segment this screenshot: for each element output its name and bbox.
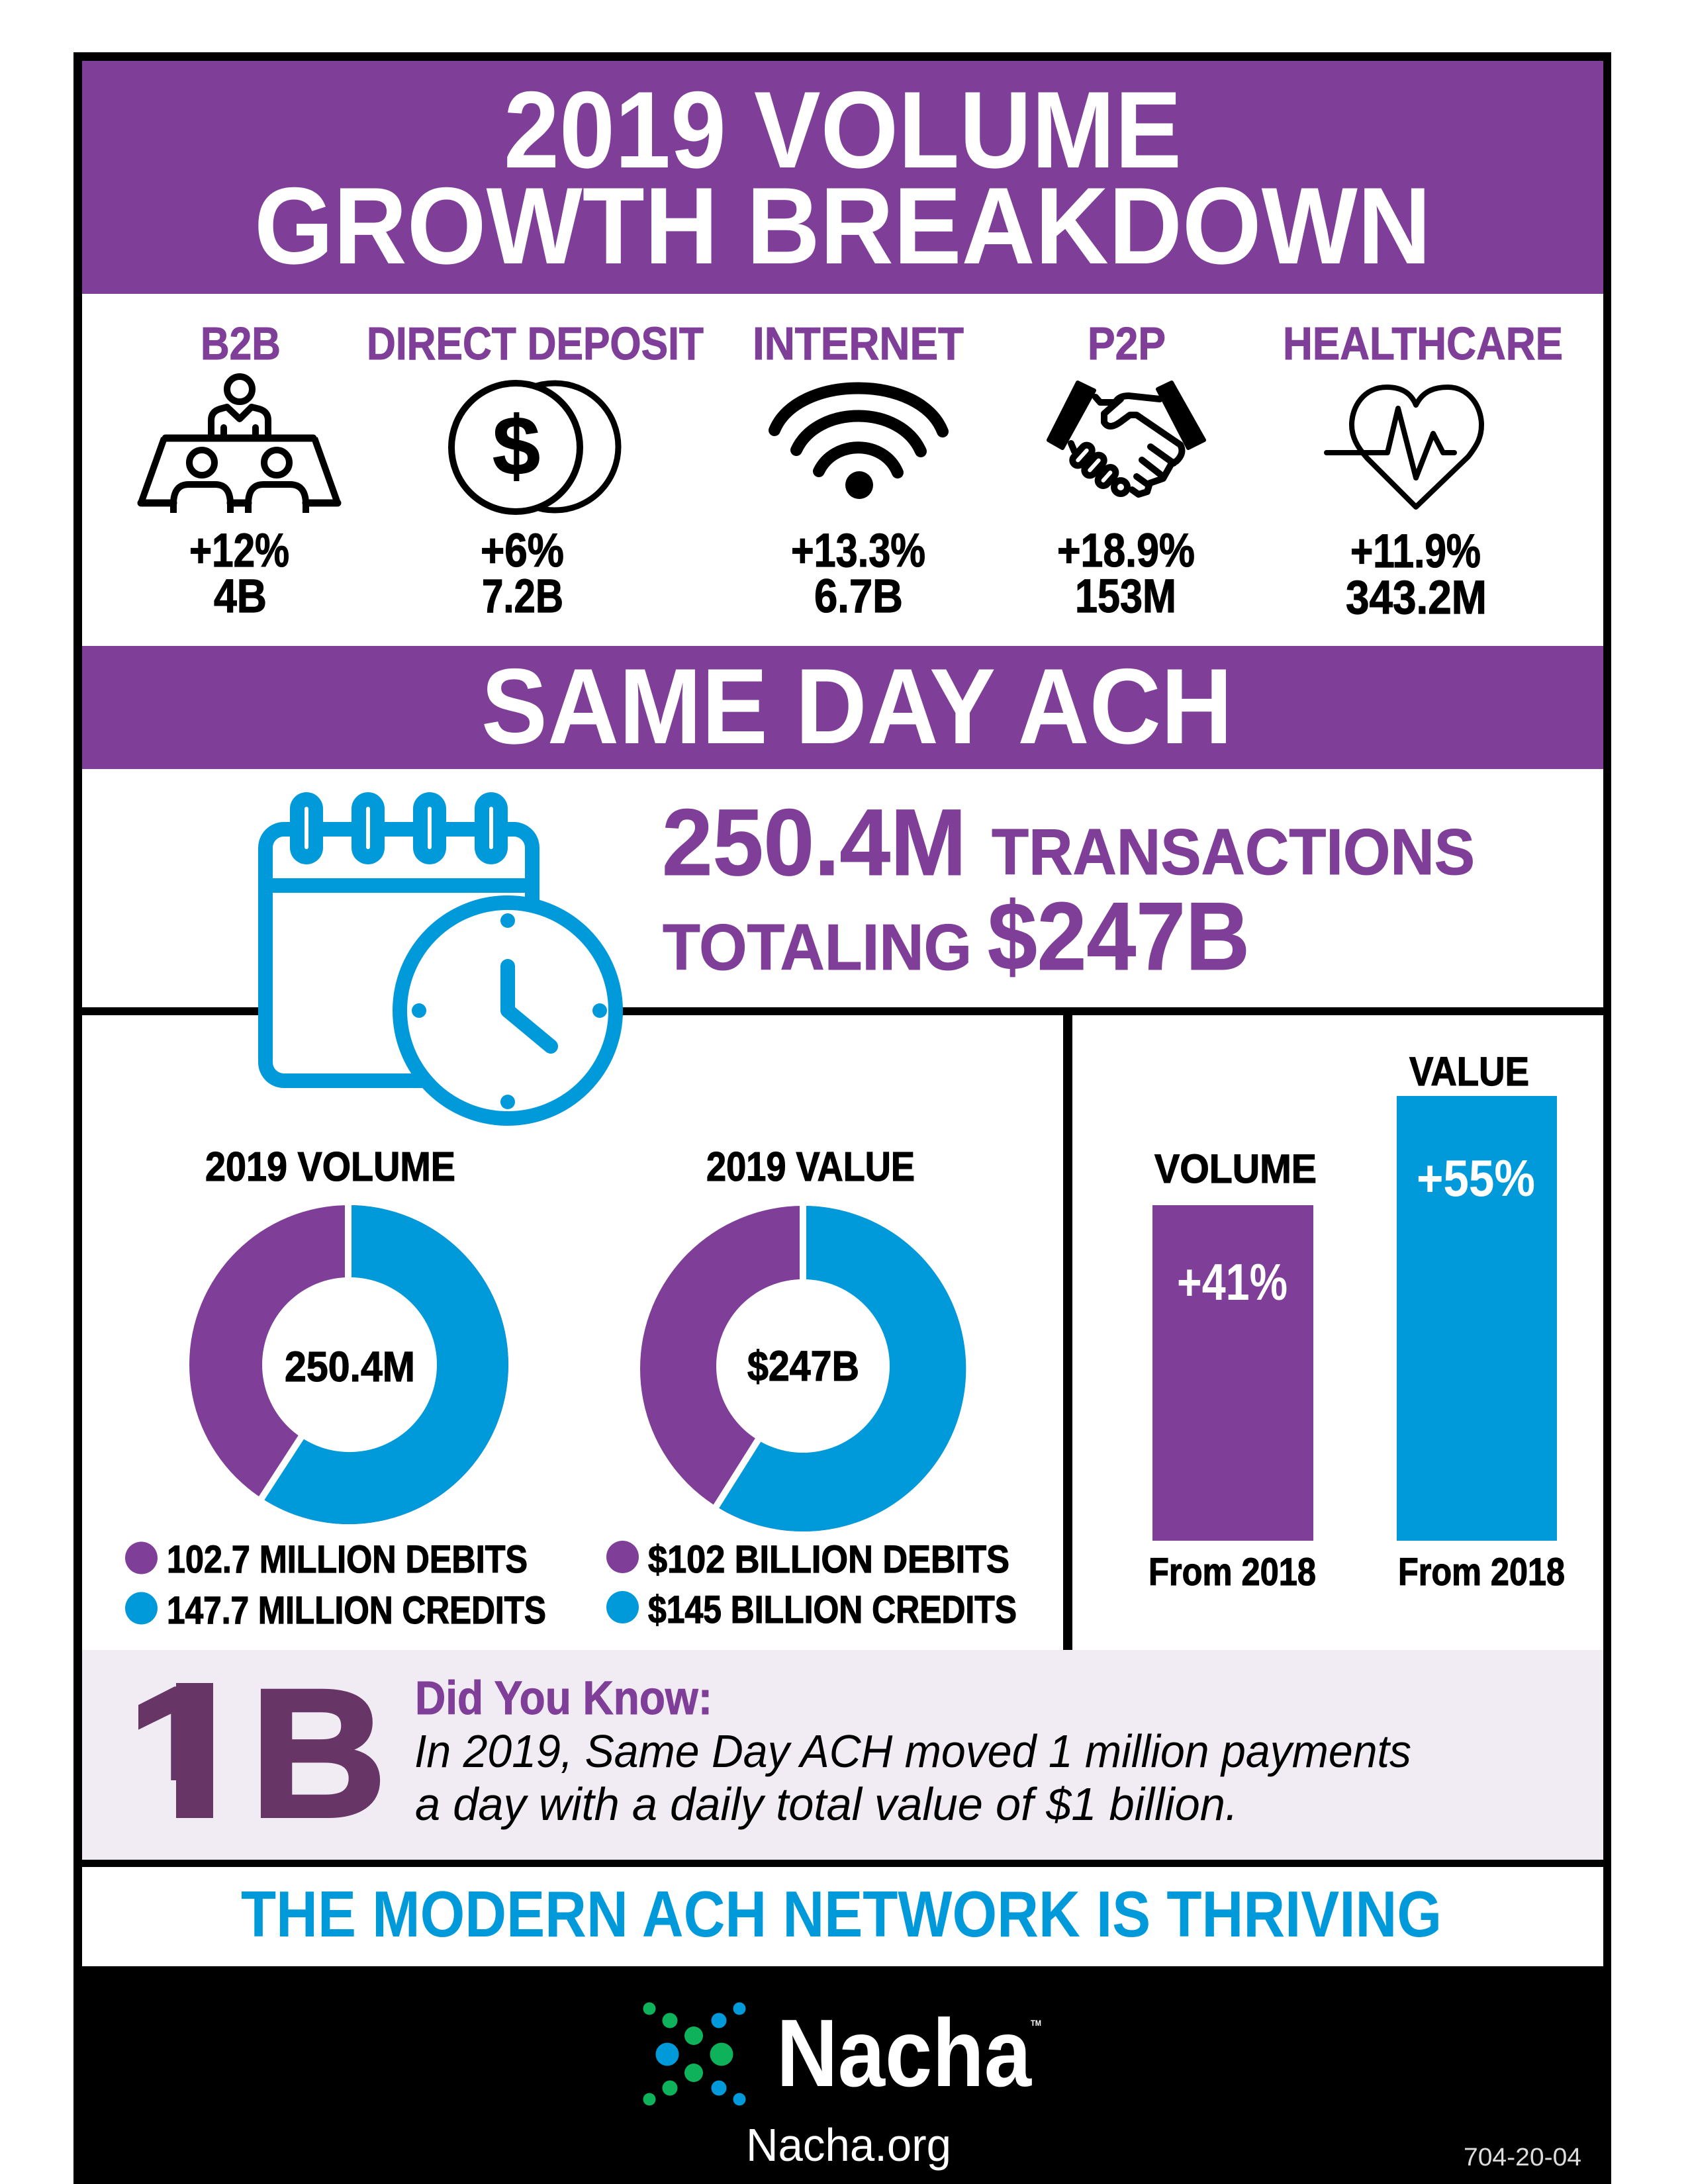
panel: 2019 volume donut (125, 1144, 546, 1632)
+11.9%: +11.9% (1350, 525, 1481, 578)
volume bar (1149, 1146, 1317, 1594)
6.7B: 6.7B (814, 570, 903, 623)
legend: debits: $102 BILLION DEBITS (648, 1538, 1009, 1581)
icon: meeting table (141, 377, 338, 513)
1B (113, 1649, 387, 1856)
4B: 4B (214, 570, 267, 623)
icon: handshake (1049, 383, 1204, 494)
category: Healthcare: HEALTHCARE (1283, 318, 1563, 369)
did you know heading: Did You Know: (415, 1672, 712, 1725)
category: Internet: INTERNET (753, 318, 964, 369)
value bar (1397, 1049, 1565, 1594)
153M: 153M (1075, 570, 1176, 623)
value bar: +55% (1417, 1149, 1535, 1207)
volume bar: +41% (1177, 1253, 1288, 1311)
logo mark (643, 2003, 745, 2106)
+13.3%: +13.3% (791, 525, 925, 577)
TRANSACTIONS: TRANSACTIONS (992, 815, 1475, 888)
250.4M: 250.4M (662, 790, 966, 895)
+6%: +6% (481, 525, 564, 577)
icon: wifi (774, 388, 943, 499)
legend: credits: $145 BILLION CREDITS (648, 1588, 1017, 1631)
1B: 1 (118, 1649, 250, 1856)
category: B2B: B2B (201, 318, 281, 369)
icon: calendar and clock (258, 792, 616, 1118)
$247B: $247B (988, 882, 1250, 990)
banner: Same Day ACH: SAME DAY ACH (481, 647, 1233, 766)
heading: 2019 value: 2019 VALUE (706, 1144, 915, 1190)
panel: same day totals (662, 790, 1475, 990)
1B: B (250, 1652, 387, 1855)
donut chart: value: $247B (747, 1342, 859, 1390)
7.2B: 7.2B (482, 570, 563, 623)
value bar: From 2018 (1398, 1551, 1565, 1594)
+18.9%: +18.9% (1057, 525, 1195, 577)
icon: heartbeat (1327, 387, 1481, 507)
category: Internet (753, 318, 964, 623)
donut chart: value (640, 1201, 966, 1531)
legend: debits: 102.7 MILLION DEBITS (167, 1538, 528, 1581)
body text: a day with a daily total value of $1 billion. (415, 1778, 1238, 1830)
panel: did you know (82, 1649, 1603, 1860)
donut chart: volume (189, 1201, 508, 1524)
category: Direct Deposit: DIRECT DEPOSIT (367, 318, 704, 369)
category: Direct Deposit (367, 318, 704, 623)
title line 2: GROWTH BREAKDOWN (254, 165, 1431, 287)
category: Healthcare (1283, 318, 1563, 624)
title banner (82, 61, 1603, 294)
TOTALING: TOTALING (663, 911, 972, 983)
icon: coins (451, 383, 618, 512)
category: P2P (1049, 318, 1204, 623)
body text (414, 1725, 1411, 1830)
+12%: +12% (189, 525, 289, 577)
donut chart: volume: 250.4M (285, 1343, 415, 1390)
trademark: TM (1031, 2019, 1041, 2028)
footer (73, 1966, 1611, 2184)
document code: 704-20-04 (1464, 2144, 1581, 2171)
category: P2P: P2P (1088, 318, 1166, 369)
343.2M: 343.2M (1346, 572, 1487, 624)
category: B2B (141, 318, 338, 623)
volume bar: VOLUME (1154, 1146, 1317, 1191)
title line 1: 2019 VOLUME (504, 69, 1182, 191)
legend: credits: 147.7 MILLION CREDITS (167, 1589, 546, 1632)
tagline: THE MODERN ACH NETWORK IS THRIVING (241, 1878, 1442, 1950)
heading: 2019 volume: 2019 VOLUME (205, 1144, 455, 1190)
body text: In 2019, Same Day ACH moved 1 million payments (414, 1725, 1411, 1777)
icon: coins: $ (492, 399, 540, 492)
logo wordmark: Nacha (776, 1999, 1032, 2107)
panel: payment categories (141, 318, 1563, 624)
panel: 2019 value donut (606, 1144, 1017, 1631)
panel: growth bar chart (1149, 1049, 1565, 1594)
website: Nacha.org (746, 2119, 951, 2171)
banner: Same Day ACH (82, 646, 1603, 769)
value bar: VALUE (1409, 1049, 1529, 1094)
volume bar: From 2018 (1149, 1551, 1316, 1594)
